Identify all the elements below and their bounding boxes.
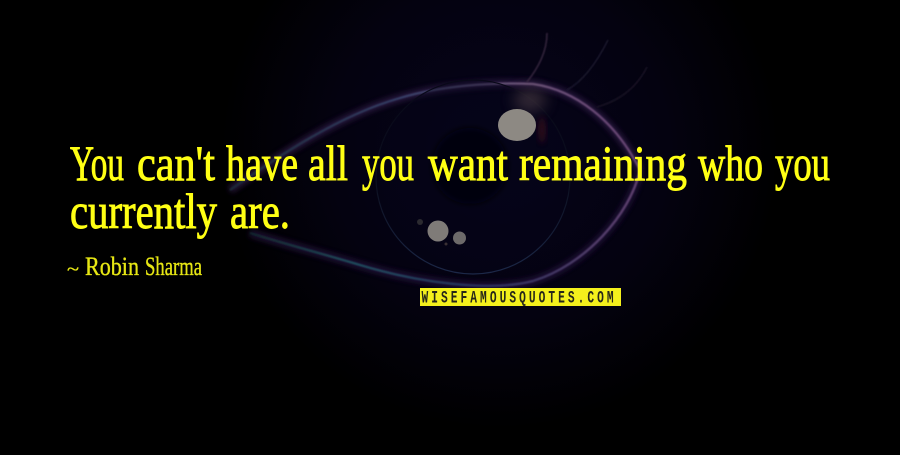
quote text: are. [230, 183, 290, 239]
attribution [67, 252, 202, 281]
quote text: have [226, 135, 298, 191]
eye upper lid [230, 84, 640, 190]
lens flare [514, 88, 546, 112]
eye lower lid [250, 170, 640, 286]
attribution: Robin [85, 252, 139, 281]
quote text: you [362, 135, 414, 191]
quote text: can't [137, 135, 215, 191]
quote text: remaining [519, 135, 687, 191]
watermark badge: WISEFAMOUSQUOTES.COM [422, 289, 617, 308]
quote text: want [428, 135, 508, 191]
pupil [432, 128, 508, 204]
eyelashes [527, 33, 647, 107]
eye highlight large [498, 109, 536, 141]
quote text: currently [70, 183, 217, 239]
quote text: You [70, 135, 124, 191]
quote text: all [308, 135, 348, 191]
quote text: you [775, 135, 830, 191]
iris [376, 80, 570, 274]
eye illustration [230, 33, 647, 286]
attribution: ~ [67, 259, 79, 279]
quote text [70, 135, 830, 239]
attribution: Sharma [145, 252, 202, 281]
eye highlight small [417, 219, 466, 246]
quote text: who [698, 135, 763, 191]
